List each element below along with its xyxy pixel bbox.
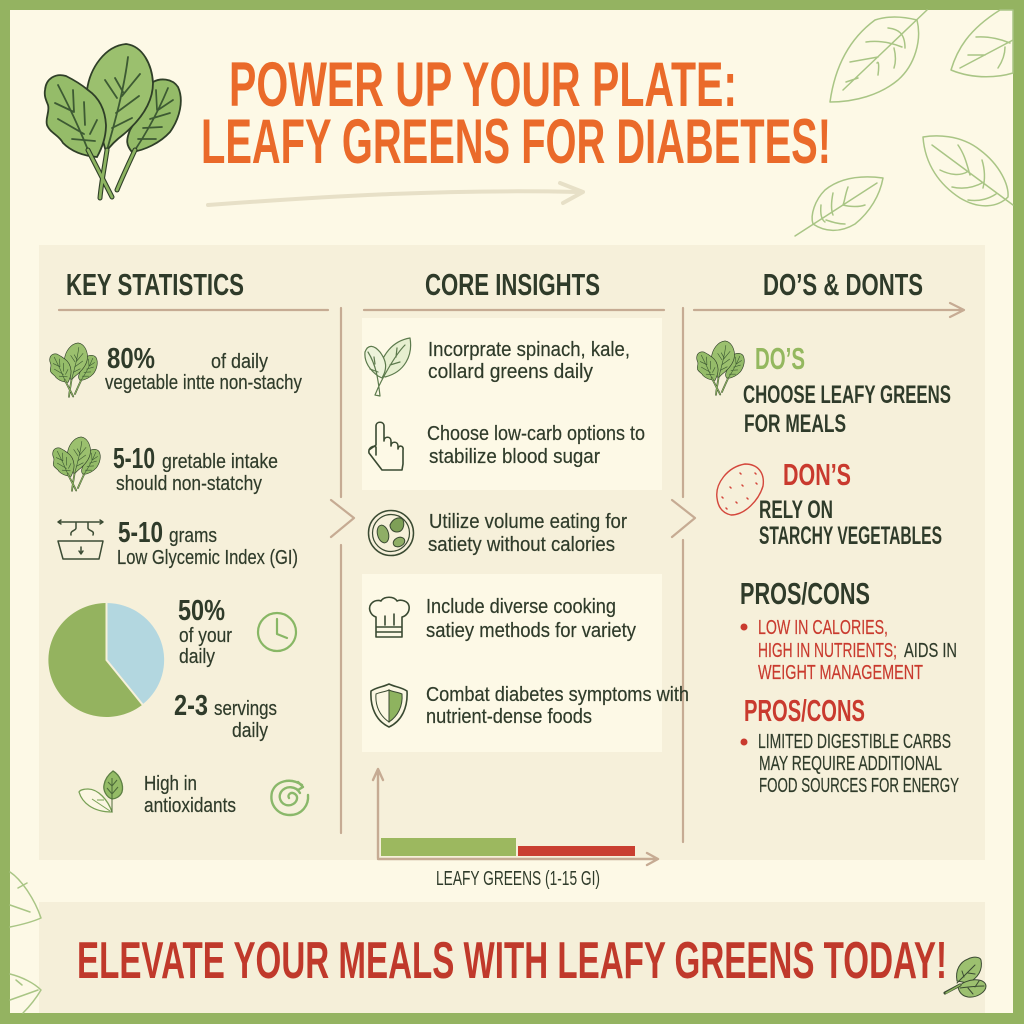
pros block: WEIGHT MANAGEMENT xyxy=(758,662,923,684)
stat: 80% of daily: 80% xyxy=(107,343,155,375)
do's block: FOR MEALS xyxy=(744,410,846,438)
panel: core insights lower card xyxy=(362,574,662,752)
stat: 80% of daily: of daily xyxy=(211,350,269,373)
stat: 50% of your daily xyxy=(178,595,232,668)
heading: key statistics: KEY STATISTICS xyxy=(66,267,244,302)
do's block: DO’S xyxy=(755,341,805,376)
icon: potato xyxy=(717,464,763,515)
decorative leaf: right middle xyxy=(923,136,1013,206)
insight: volume eating xyxy=(368,510,627,556)
insight: volume eating: satiety without calories xyxy=(428,533,615,556)
text: high in antioxidants: High in xyxy=(144,772,197,795)
decorative leaf: top right large xyxy=(830,10,927,102)
stat: 50% of your daily: 50% xyxy=(178,595,225,627)
insight: combat symptoms xyxy=(371,683,689,728)
icon: plate with greens xyxy=(368,510,414,556)
arrow: header swoosh xyxy=(208,183,583,205)
icon: clock xyxy=(258,613,296,651)
insight: combat symptoms: Combat diabetes symptoms with xyxy=(426,683,689,706)
chart axes xyxy=(373,769,658,865)
stat: 2-3 servings daily: 2-3 xyxy=(174,690,208,722)
decorative leaf: below title xyxy=(795,177,883,236)
panel: main content background xyxy=(39,245,985,860)
decorative leaf: top right corner xyxy=(951,10,1013,77)
icon: chef hat xyxy=(370,597,409,637)
stat: 2-3 servings daily: servings xyxy=(214,697,277,720)
insight: cooking methods xyxy=(370,595,637,642)
icon: shield xyxy=(371,684,407,727)
cons block: PROS/CONS xyxy=(744,693,865,728)
text: high in antioxidants: antioxidants xyxy=(144,794,236,817)
insight: cooking methods: Include diverse cooking xyxy=(426,595,616,618)
column rules and chevrons xyxy=(59,303,964,842)
stat: 5-10 vegetable intake: gretable intake xyxy=(162,450,278,473)
stat: 2-3 servings daily xyxy=(174,690,277,742)
stat: 5-10 vegetable intake: should non-statchy xyxy=(116,472,263,495)
pros block: HIGH IN NUTRIENTS; xyxy=(758,640,897,662)
insight: incorporate spinach: collard greens daily xyxy=(428,360,594,383)
stat: 5-10 grams: grams xyxy=(169,524,217,547)
icon: antioxidant leaves xyxy=(79,771,123,812)
stat: 2-3 servings daily: daily xyxy=(232,719,269,742)
icon: pointing hand xyxy=(369,422,403,470)
bar: leafy greens xyxy=(381,838,516,856)
title: POWER UP YOUR PLATE: xyxy=(229,50,737,120)
stat: 5-10 vegetable intake: 5-10 xyxy=(113,443,155,475)
bar chart: glycemic index xyxy=(373,769,658,890)
panel: core insights upper card xyxy=(362,318,662,490)
cons block: MAY REQUIRE ADDITIONAL xyxy=(759,753,942,775)
pros block: LOW IN CALORIES, xyxy=(758,617,888,639)
decorative leaf: lower left bottom xyxy=(10,974,41,1013)
don'ts block xyxy=(717,457,942,550)
icon: leaf outline xyxy=(365,338,411,396)
stat: 80% of daily: vegetable intte non-stachy xyxy=(105,371,303,394)
bullet xyxy=(740,624,748,630)
title xyxy=(201,50,831,177)
icon: spiral xyxy=(271,781,308,815)
pros block: AIDS IN xyxy=(904,640,957,662)
icon: footer spinach xyxy=(945,957,986,997)
insight: choose low-carb xyxy=(369,422,645,470)
cons block xyxy=(740,693,959,797)
insight: incorporate spinach: Incorprate spinach, kale, xyxy=(428,338,630,361)
heading: core insights: CORE INSIGHTS xyxy=(425,267,600,302)
heading: do's and don'ts: DO’S & DONTS xyxy=(763,267,923,302)
icon: spinach xyxy=(697,341,744,395)
insight: choose low-carb: Choose low-carb options to xyxy=(427,422,645,445)
text: high in antioxidants xyxy=(144,772,236,817)
don'ts block: RELY ON xyxy=(759,496,833,524)
pie chart xyxy=(48,603,164,717)
insight: volume eating: Utilize volume eating for xyxy=(429,510,627,533)
icon: scale xyxy=(58,520,103,559)
stat: 80% of daily xyxy=(50,343,303,397)
icon: spinach xyxy=(53,437,100,491)
stat: 5-10 vegetable intake xyxy=(53,437,278,495)
stat: 5-10 grams: 5-10 xyxy=(118,517,163,549)
insight: cooking methods: satiey methods for variety xyxy=(426,619,637,642)
stat: 5-10 grams: Low Glycemic Index (GI) xyxy=(117,546,298,569)
stat: 5-10 grams xyxy=(58,517,298,569)
insight: incorporate spinach xyxy=(365,338,630,396)
insight: combat symptoms: nutrient-dense foods xyxy=(426,705,592,728)
pros block: PROS/CONS xyxy=(740,576,870,611)
stat: 50% of your daily: of your xyxy=(179,624,232,647)
bar: starchy xyxy=(518,846,635,856)
icon: spinach xyxy=(50,343,97,397)
do's block xyxy=(697,341,951,438)
bullet xyxy=(740,738,748,746)
icon: spinach header xyxy=(45,44,181,198)
chart label: LEAFY GREENS (1-15 GI) xyxy=(436,868,600,890)
pros block xyxy=(740,576,957,684)
decorative leaf: lower left top xyxy=(10,872,41,927)
stat: 50% of your daily: daily xyxy=(179,645,216,668)
don'ts block: DON’S xyxy=(783,457,851,492)
insight: choose low-carb: stabilize blood sugar xyxy=(429,445,600,468)
panel: footer background xyxy=(39,902,985,1013)
